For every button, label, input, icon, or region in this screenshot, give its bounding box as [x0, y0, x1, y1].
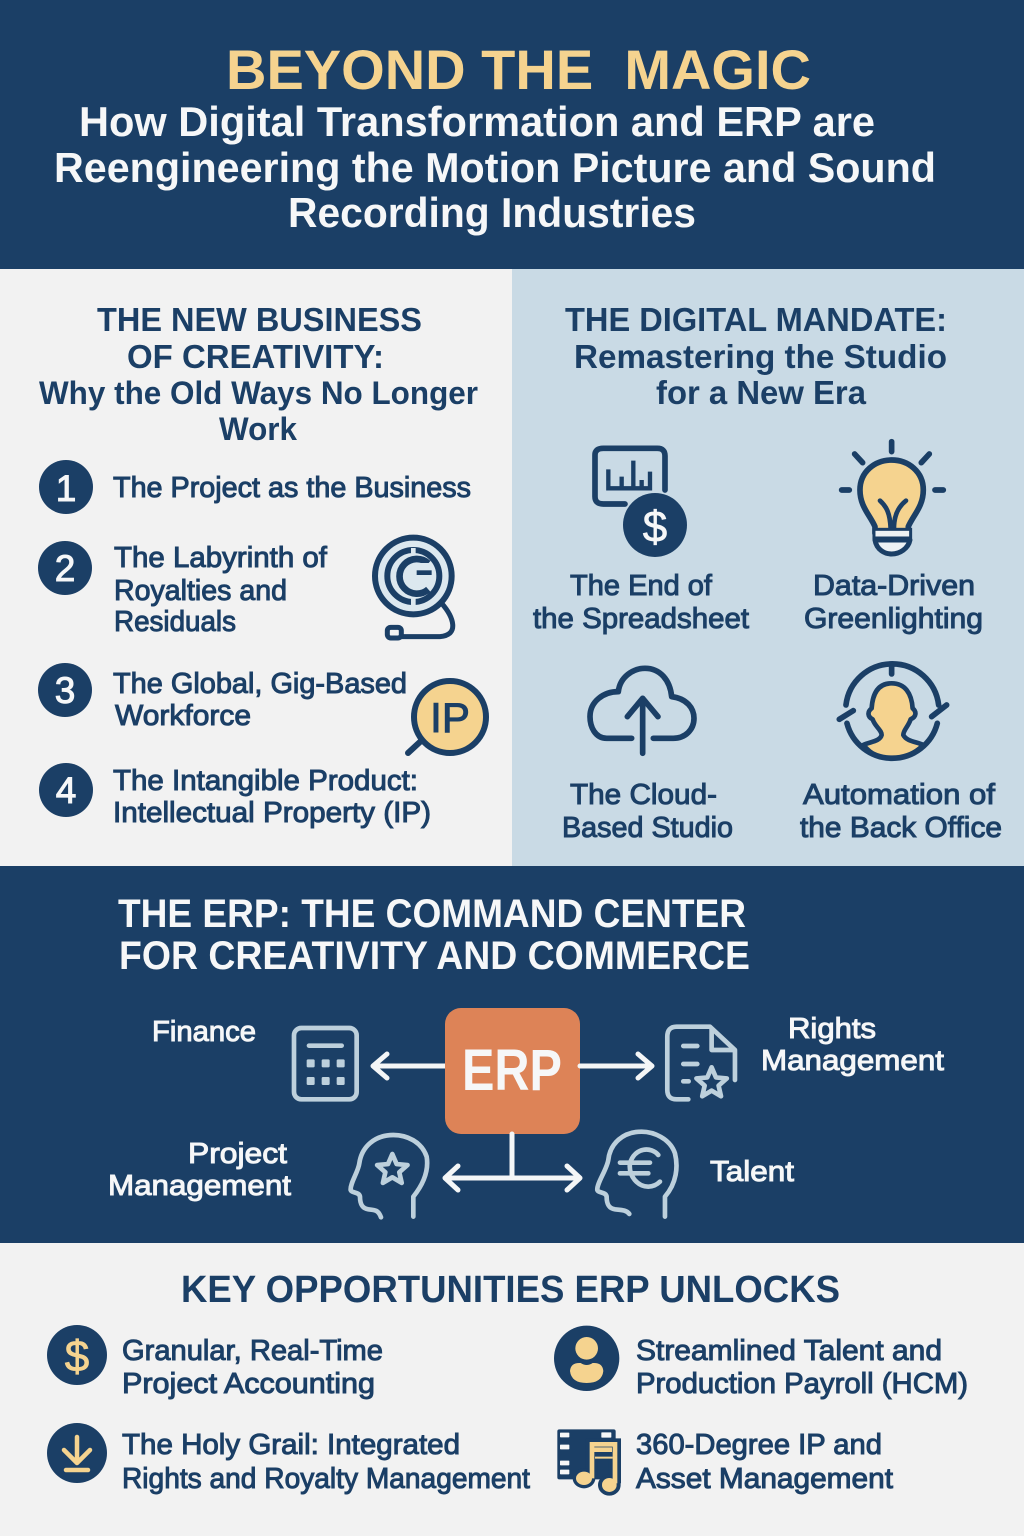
panel heading: KEY OPPORTUNITIES ERP UNLOCKS [181, 1269, 840, 1311]
item 2 [38, 541, 328, 638]
icon: spreadsheet and coin: $ [643, 503, 667, 552]
item 2: 2 [55, 548, 75, 589]
panel heading: THE NEW BUSINESS [97, 301, 422, 338]
panel heading: Work [219, 411, 297, 447]
item 3 [38, 663, 407, 732]
label: rights management: Rights [788, 1013, 876, 1045]
ERP box: ERP [462, 1038, 562, 1103]
opportunity: talent payroll [554, 1326, 968, 1400]
panel heading: FOR CREATIVITY AND COMMERCE [119, 934, 750, 978]
item 3: Workforce [115, 700, 251, 732]
panel heading [39, 301, 478, 447]
label: project management: Management [108, 1170, 291, 1202]
label: project management: Project [188, 1138, 287, 1170]
label: data-driven greenlighting: Data-Driven [813, 570, 975, 602]
label: end of the spreadsheet: the Spreadsheet [533, 603, 749, 635]
item 1 [39, 460, 471, 514]
header band [0, 0, 1024, 269]
label: finance: Finance [152, 1016, 256, 1048]
label: automation of the back office [800, 779, 1002, 844]
label: cloud-based studio: The Cloud- [570, 779, 717, 811]
panel: digital mandate [512, 269, 1024, 866]
icon: calculator [294, 1028, 357, 1099]
item 2: Residuals [114, 606, 236, 638]
opportunity: IP and asset management [557, 1429, 893, 1496]
item 3: 3 [55, 670, 75, 711]
item 4: 4 [56, 770, 76, 811]
icon: rights document [667, 1027, 735, 1099]
label: rights management [761, 1013, 944, 1077]
icon: person automation ring [839, 664, 947, 758]
item 1: 1 [56, 468, 76, 509]
item 1: The Project as the Business [113, 472, 471, 504]
opportunity: rights and royalties: Rights and Royalty Management [122, 1463, 530, 1495]
opportunity: project accounting: Granular, Real-Time [122, 1335, 383, 1367]
opportunity: project accounting: Project Accounting [122, 1368, 375, 1400]
icon: film and music note [557, 1429, 621, 1496]
item 3: The Global, Gig-Based [113, 668, 407, 700]
opportunity: IP and asset management: 360-Degree IP and [636, 1429, 882, 1461]
panel: key opportunities [0, 1243, 1024, 1536]
panel heading: OF CREATIVITY: [127, 338, 384, 375]
panel heading [565, 301, 947, 411]
label: cloud-based studio [562, 779, 733, 844]
item 4: The Intangible Product: [113, 765, 418, 797]
icon: download [47, 1423, 107, 1483]
label: data-driven greenlighting: Greenlighting [804, 603, 983, 635]
label: project management [108, 1138, 291, 1202]
title: BEYOND THE MAGIC [226, 38, 811, 101]
label: end of the spreadsheet: The End of [570, 570, 713, 602]
icon: spreadsheet and coin [595, 448, 687, 557]
panel heading: for a New Era [656, 374, 867, 411]
panel heading: THE ERP: THE COMMAND CENTER [118, 892, 746, 936]
icon: head with star [351, 1135, 427, 1217]
arrow: ERP to finance [373, 1054, 445, 1078]
opportunity: talent payroll: Production Payroll (HCM) [636, 1368, 968, 1400]
item 2: The Labyrinth of [114, 542, 328, 574]
ERP box [445, 1008, 580, 1134]
label: automation of the back office: the Back Office [800, 812, 1002, 844]
icon: cloud upload [590, 668, 694, 753]
panel: ERP command center [0, 866, 1024, 1243]
opportunity: rights and royalties [47, 1423, 530, 1495]
icon: IP magnifier: IP [430, 694, 470, 741]
label: talent: Talent [710, 1156, 794, 1188]
panel heading: THE DIGITAL MANDATE: [565, 301, 947, 338]
icon: light bulb [842, 442, 943, 554]
subtitle: How Digital Transformation and ERP are [79, 98, 875, 145]
item 2: Royalties and [114, 575, 287, 607]
icon: IP magnifier [408, 681, 486, 753]
subtitle [54, 98, 936, 236]
opportunity: talent payroll: Streamlined Talent and [636, 1335, 942, 1367]
arrow: ERP to project and talent [445, 1134, 580, 1190]
icon: dollar [47, 1325, 107, 1385]
item 4: Intellectual Property (IP) [113, 797, 431, 829]
panel heading: Why the Old Ways No Longer [39, 375, 478, 411]
opportunity: project accounting [47, 1325, 383, 1400]
label: automation of the back office: Automation of [803, 779, 996, 811]
icon: person [554, 1326, 619, 1391]
subtitle: Recording Industries [288, 189, 696, 236]
panel heading: Remastering the Studio [574, 338, 947, 375]
panel heading [118, 892, 750, 978]
icon: dollar: $ [65, 1332, 89, 1381]
label: end of the spreadsheet [533, 570, 749, 635]
label: cloud-based studio: Based Studio [562, 812, 733, 844]
label: data-driven greenlighting [804, 570, 983, 635]
panel: new business of creativity [0, 269, 512, 866]
icon: labyrinth [375, 538, 453, 638]
opportunity: rights and royalties: The Holy Grail: Integrated [122, 1429, 460, 1461]
icon: head with euro [597, 1132, 676, 1217]
label: rights management: Management [761, 1045, 944, 1077]
subtitle: Reengineering the Motion Picture and Sound [54, 144, 936, 191]
item 4 [39, 763, 431, 829]
arrow: ERP to rights management [580, 1054, 652, 1078]
opportunity: IP and asset management: Asset Management [636, 1463, 893, 1495]
